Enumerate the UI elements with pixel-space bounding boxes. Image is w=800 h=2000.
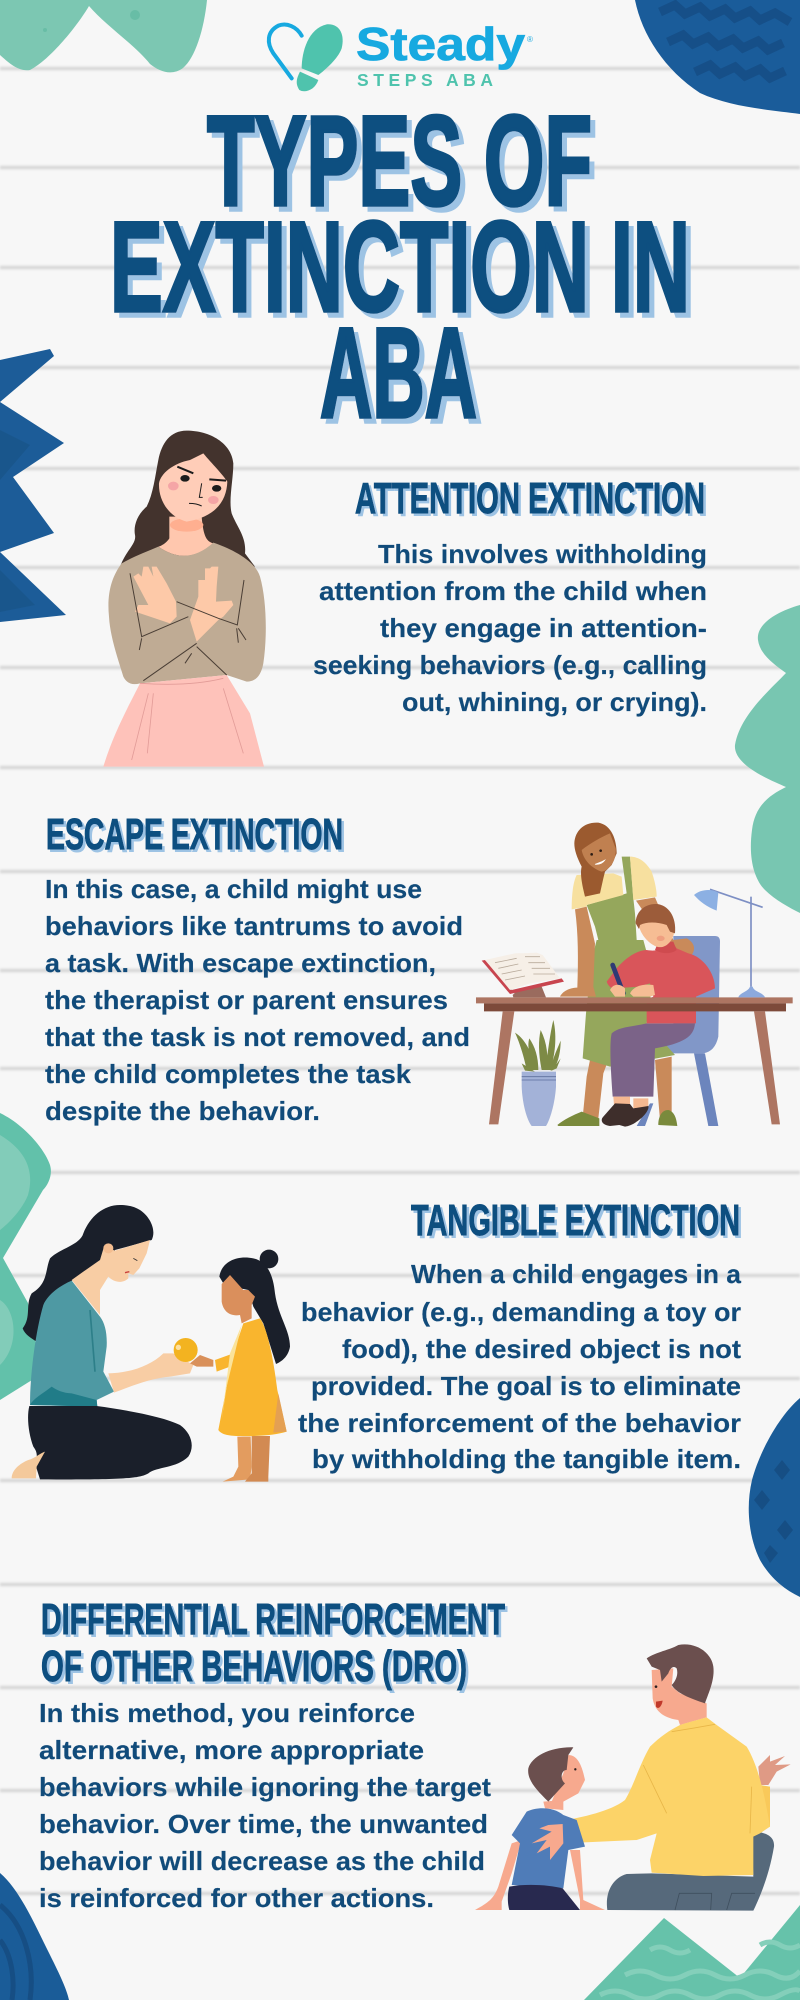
decorative blob: right teal bbox=[735, 605, 800, 913]
heading: OF OTHER BEHAVIORS (DRO) bbox=[41, 1642, 467, 1691]
body text: In this case, a child might use bbox=[45, 874, 422, 904]
heading bbox=[41, 1595, 505, 1691]
body text: that the task is not removed, and bbox=[45, 1022, 470, 1052]
decorative blob: bottom left navy bbox=[0, 1873, 69, 2000]
title: ABA bbox=[320, 302, 477, 445]
body text bbox=[39, 1698, 491, 1913]
decorative blob: bottom right teal mountains bbox=[584, 1905, 800, 2000]
body text: the reinforcement of the behavior bbox=[298, 1408, 741, 1438]
panel: escape extinction bbox=[45, 810, 793, 1127]
illustration: mother and child with ball bbox=[12, 1205, 290, 1482]
illustration: father and son bbox=[475, 1644, 791, 1911]
logo wordmark: Steady bbox=[356, 18, 525, 70]
decorative blob: right navy bbox=[749, 1398, 800, 1597]
body text: alternative, more appropriate bbox=[39, 1735, 424, 1765]
body text: attention from the child when bbox=[319, 576, 707, 606]
body text bbox=[313, 539, 707, 717]
heading: DIFFERENTIAL REINFORCEMENT bbox=[41, 1595, 505, 1644]
body text: despite the behavior. bbox=[45, 1096, 320, 1126]
decorative blob: left navy spikes bbox=[0, 349, 66, 622]
illustration: parent and child at desk bbox=[476, 823, 793, 1127]
logo tagline: STEPS ABA bbox=[357, 70, 493, 90]
body text: by withholding the tangible item. bbox=[312, 1444, 741, 1474]
body text: When a child engages in a bbox=[411, 1259, 742, 1289]
body text: food), the desired object is not bbox=[342, 1334, 741, 1364]
panel: attention extinction bbox=[103, 431, 707, 767]
body text: provided. The goal is to eliminate bbox=[311, 1371, 741, 1401]
body text: out, whining, or crying). bbox=[402, 687, 707, 717]
body text: This involves withholding bbox=[378, 539, 707, 569]
body text: a task. With escape extinction, bbox=[45, 948, 436, 978]
body text: seeking behaviors (e.g., calling bbox=[313, 650, 707, 680]
body text: the child completes the task bbox=[45, 1059, 412, 1089]
logo bbox=[269, 18, 533, 91]
body text: behavior will decrease as the child bbox=[39, 1846, 485, 1876]
decorative blob: left teal bbox=[0, 1113, 51, 1400]
body text: is reinforced for other actions. bbox=[39, 1883, 434, 1913]
panel: differential reinforcement bbox=[39, 1595, 791, 1913]
body text: In this method, you reinforce bbox=[39, 1698, 415, 1728]
title bbox=[110, 90, 690, 445]
registered mark: ® bbox=[527, 35, 533, 44]
body text: behaviors like tantrums to avoid bbox=[45, 911, 463, 941]
body text: they engage in attention- bbox=[380, 613, 707, 643]
body text bbox=[298, 1259, 742, 1474]
icon: heart and footprint bbox=[269, 24, 343, 91]
body text: the therapist or parent ensures bbox=[45, 985, 448, 1015]
body text: behavior. Over time, the unwanted bbox=[39, 1809, 488, 1839]
body text: behavior (e.g., demanding a toy or bbox=[301, 1297, 741, 1327]
illustration: woman with crossed arms bbox=[103, 431, 266, 767]
panel: tangible extinction bbox=[12, 1196, 742, 1482]
decorative blob: top left teal bbox=[0, 0, 207, 72]
heading: ESCAPE EXTINCTION bbox=[46, 810, 343, 859]
body text: behaviors while ignoring the target bbox=[39, 1772, 491, 1802]
decorative blob: top right navy bbox=[635, 0, 800, 114]
body text bbox=[45, 874, 470, 1126]
